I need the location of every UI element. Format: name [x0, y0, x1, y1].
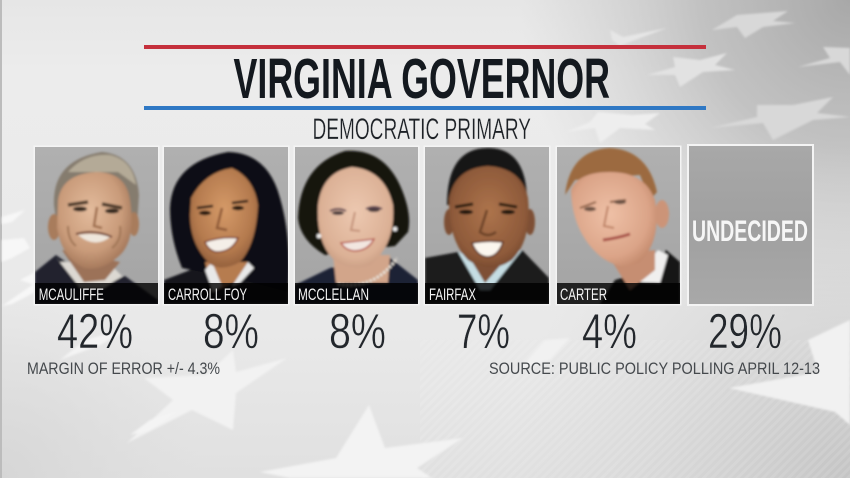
- value: Fairfax 7%: 7%: [457, 305, 510, 359]
- title: VIRGINIA GOVERNOR: [234, 47, 610, 111]
- label: Fairfax: FAIRFAX: [429, 285, 476, 304]
- value: McAuliffe 42%: 42%: [57, 305, 133, 359]
- value: Undecided 29%: 29%: [708, 305, 782, 359]
- subtitle: DEMOCRATIC PRIMARY: [312, 113, 531, 146]
- panel: Carter: [556, 146, 682, 306]
- label: Carter: CARTER: [560, 285, 607, 304]
- value: Carter 4%: 4%: [582, 305, 637, 359]
- value: Carroll Foy 8%: 8%: [203, 305, 259, 359]
- panel: Undecided: [688, 145, 813, 305]
- portrait: McAuliffe: [35, 152, 158, 304]
- value: McClellan 8%: 8%: [329, 305, 386, 359]
- panel: McClellan: [294, 146, 420, 306]
- panel: McAuliffe: [34, 146, 160, 306]
- portrait: Carter: [565, 148, 680, 304]
- percentages row: [57, 305, 782, 359]
- portrait: Carroll Foy: [164, 152, 289, 304]
- panel: Carroll Foy: [162, 146, 290, 306]
- blue rule: [144, 106, 706, 110]
- panel: Fairfax: [424, 146, 550, 306]
- margin of error note: MARGIN OF ERROR +/- 4.3%: [27, 359, 220, 378]
- top red rule: [144, 45, 706, 49]
- portrait: McClellan: [295, 151, 418, 304]
- label: McClellan: MCCLELLAN: [298, 285, 369, 304]
- label: McAuliffe: MCAULIFFE: [39, 285, 104, 304]
- label: Carroll Foy: CARROLL FOY: [168, 285, 247, 304]
- portrait: Fairfax: [425, 148, 549, 304]
